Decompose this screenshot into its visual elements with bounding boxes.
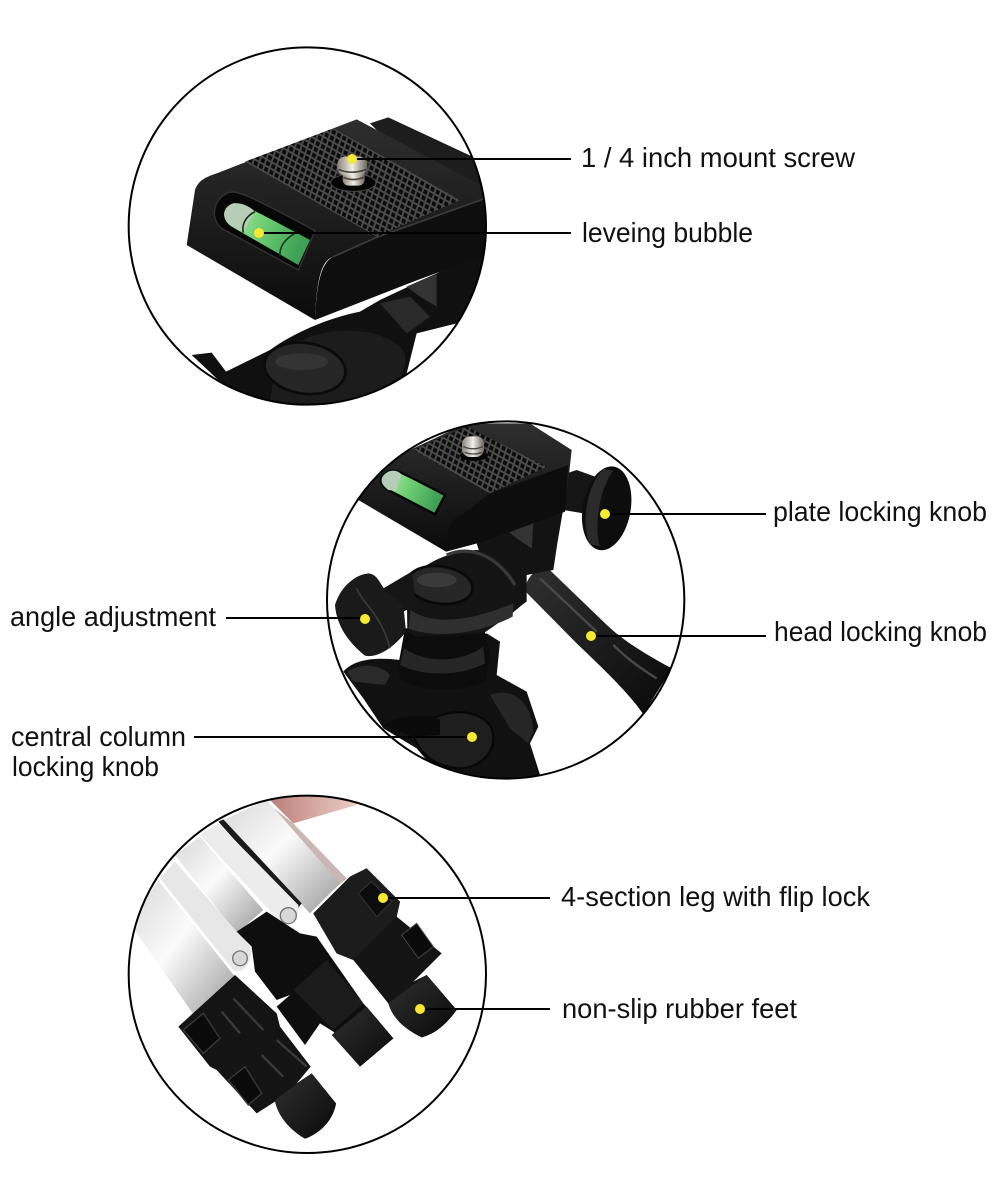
middle leg hardware	[237, 912, 393, 1067]
knurled top	[245, 128, 460, 237]
panel: tripod head close-up	[327, 421, 684, 780]
callout: central column locking knob: locking knob	[12, 751, 159, 782]
rivets	[280, 908, 296, 924]
base and leg mounts	[343, 633, 542, 780]
right knob shaft	[565, 470, 595, 514]
callout: 1/4 inch mount screw	[347, 142, 856, 173]
clamp under plate	[476, 512, 563, 605]
callout: central column locking knob: central column	[11, 721, 186, 752]
dome knob	[270, 331, 405, 403]
callout: leveling bubble	[254, 217, 753, 248]
left leg bar	[160, 862, 252, 971]
finger	[270, 796, 357, 824]
mount screw	[331, 157, 376, 191]
callout: leveling bubble: leveing bubble	[582, 217, 753, 248]
callout: plate locking knob	[600, 496, 987, 527]
right leg hardware	[313, 868, 457, 1037]
callout: non-slip rubber feet	[415, 993, 797, 1024]
collar	[399, 628, 486, 660]
dome knob	[410, 564, 474, 606]
plate locking knob	[582, 466, 632, 550]
clamp rear	[370, 117, 480, 185]
right leg tube	[223, 800, 340, 913]
rear strip	[274, 808, 346, 890]
callout: central column locking knob	[11, 721, 477, 782]
level vial slot	[214, 192, 315, 270]
callout: angle adjustment: angle adjustment	[10, 601, 216, 632]
angle adjustment knob	[335, 573, 406, 656]
head body	[407, 550, 526, 637]
plate body	[187, 119, 488, 320]
handle	[524, 568, 672, 714]
callout: angle adjustment	[10, 601, 370, 632]
middle leg tube	[175, 837, 263, 933]
callout: head locking knob: head locking knob	[774, 616, 987, 647]
callout: head locking knob	[586, 616, 987, 647]
callout: 4-section leg with flip lock	[378, 881, 871, 912]
knurled top	[413, 427, 547, 493]
angle knob shaft	[384, 572, 415, 612]
tripod head below plate	[192, 247, 490, 407]
middle leg bar	[200, 823, 299, 924]
left leg hardware	[178, 975, 336, 1139]
left leg tube	[130, 881, 235, 1017]
callout: non-slip rubber feet: non-slip rubber feet	[562, 993, 797, 1024]
screw	[460, 436, 488, 461]
panel: tripod legs close-up	[129, 793, 486, 1153]
panel: mounting plate close-up	[129, 47, 490, 407]
callout: 4-section leg with flip lock: 4-section leg with flip lock	[561, 881, 871, 912]
callout: plate locking knob: plate locking knob	[773, 496, 987, 527]
level vial	[381, 471, 445, 514]
callout: 1/4 inch mount screw: 1 / 4 inch mount screw	[581, 142, 856, 173]
plate body	[358, 423, 572, 552]
level vial	[224, 203, 310, 265]
